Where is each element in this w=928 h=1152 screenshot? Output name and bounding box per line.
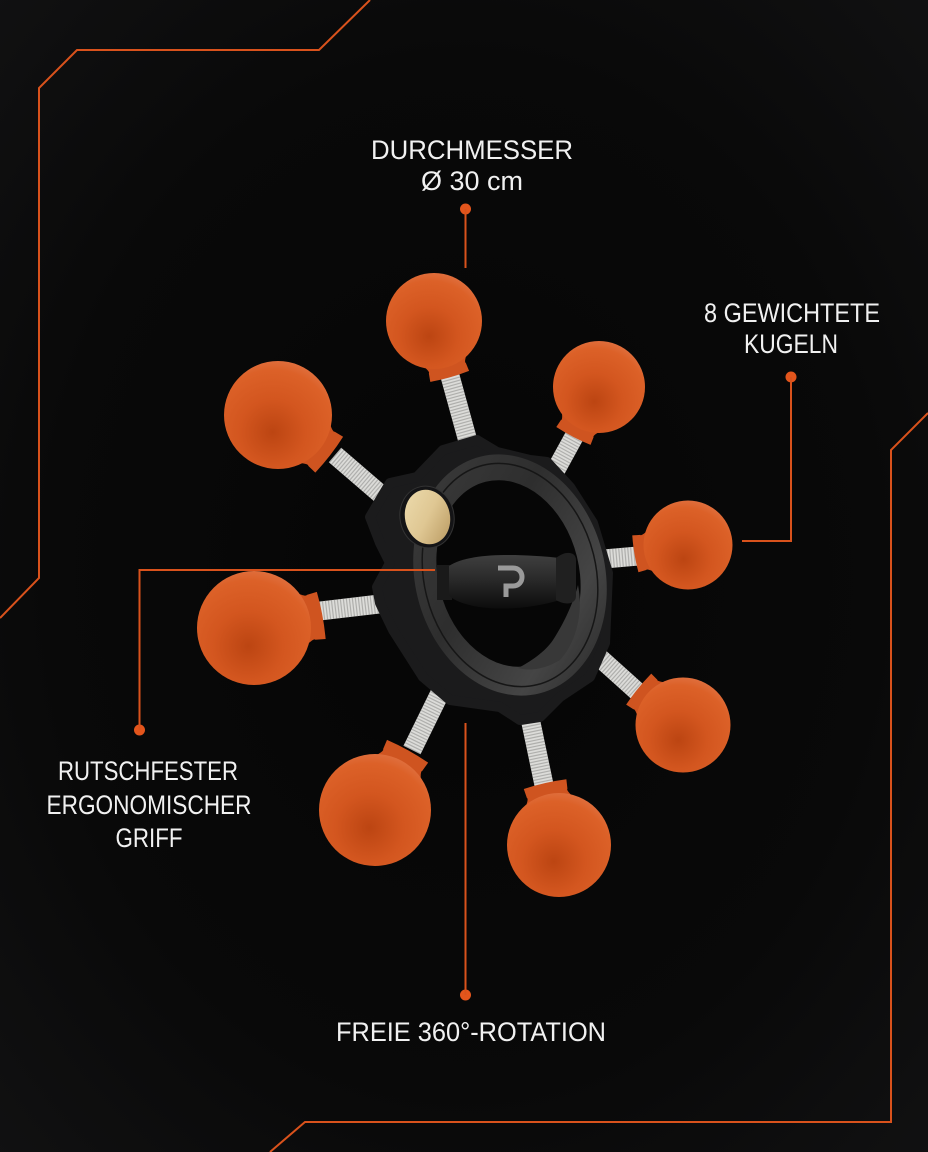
label: ERGONOMISCHER (46, 790, 252, 820)
callout: weighted balls (704, 298, 880, 541)
leader line (460, 204, 471, 268)
label: RUTSCHFESTER (58, 756, 238, 786)
label: GRIFF (116, 823, 182, 853)
label: DURCHMESSER (371, 135, 573, 165)
leader line (134, 570, 435, 736)
stems (320, 376, 650, 785)
callout: ergonomic grip (46, 570, 435, 853)
label (704, 298, 880, 359)
frame line: top left (0, 0, 370, 618)
main ring (388, 434, 632, 716)
label: FREIE 360°-ROTATION (336, 1017, 606, 1047)
ring groove (399, 445, 621, 705)
ball necks (294, 351, 668, 810)
ring inner hole (417, 465, 600, 682)
gold button (394, 481, 460, 553)
label: 8 GEWICHTETE (704, 298, 880, 328)
leader line (742, 372, 796, 541)
frame line: bottom right (270, 413, 928, 1152)
label (371, 135, 573, 196)
handle (437, 553, 576, 609)
callout: rotation (336, 723, 606, 1047)
inner ring wall (518, 585, 580, 670)
handle logo (498, 568, 522, 597)
gear body (370, 440, 608, 720)
leader line (460, 723, 471, 1000)
product: spinner with weighted balls (197, 273, 732, 897)
balls (197, 273, 732, 897)
callout: diameter (371, 135, 573, 268)
label (46, 756, 252, 853)
label: Ø 30 cm (421, 166, 523, 196)
label: KUGELN (744, 329, 838, 359)
